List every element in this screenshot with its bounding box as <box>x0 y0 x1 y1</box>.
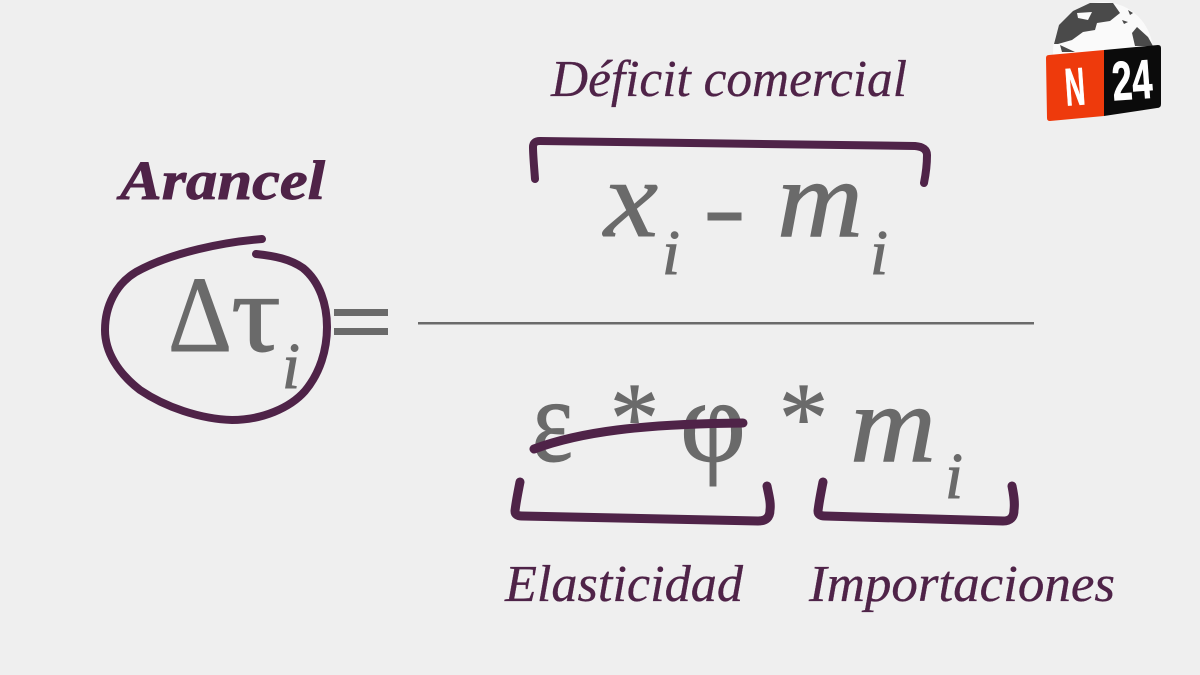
left side: delta tau i: Δ <box>168 256 232 375</box>
denominator: epsilon * phi * m_i: ε <box>532 354 573 487</box>
bracket: imports <box>818 482 1014 521</box>
denominator: epsilon * phi * m_i: m <box>850 363 936 485</box>
logo: black panel <box>1104 45 1161 116</box>
strike-through over epsilon and phi <box>534 423 743 449</box>
logo: N: N <box>1063 57 1087 118</box>
label: Déficit comercial: Déficit comercial <box>550 51 907 108</box>
label: Arancel: Arancel <box>117 150 326 211</box>
denominator: epsilon * phi * m_i: i <box>945 440 963 513</box>
icon: globe <box>1053 2 1153 102</box>
top bracket <box>533 141 927 183</box>
numerator: x_i - m_i: x <box>602 138 658 260</box>
numerator: x_i - m_i <box>602 138 888 288</box>
denominator: epsilon * phi * m_i <box>532 354 963 513</box>
left side: delta tau i <box>168 252 300 403</box>
denominator: epsilon * phi * m_i: φ <box>680 356 746 487</box>
left side: delta tau i: τ <box>231 252 281 376</box>
left side: delta tau i: i <box>282 330 300 403</box>
denominator: epsilon * phi * m_i: * <box>610 362 659 473</box>
logo: 24: 24 <box>1110 48 1154 112</box>
label: Elasticidad: Elasticidad <box>504 556 744 613</box>
fraction line <box>418 322 1034 324</box>
numerator: x_i - m_i: i <box>662 217 680 288</box>
denominator: epsilon * phi * m_i: * <box>779 362 828 473</box>
numerator: x_i - m_i: i <box>870 217 888 288</box>
logo: N24 globe <box>1046 2 1161 121</box>
equals sign <box>334 309 388 335</box>
bracket: elasticity <box>515 482 770 521</box>
hand-drawn circle around delta tau <box>105 239 327 420</box>
numerator: x_i - m_i: m <box>777 138 863 260</box>
logo: red panel <box>1046 50 1104 121</box>
label: Importaciones: Importaciones <box>808 556 1115 613</box>
